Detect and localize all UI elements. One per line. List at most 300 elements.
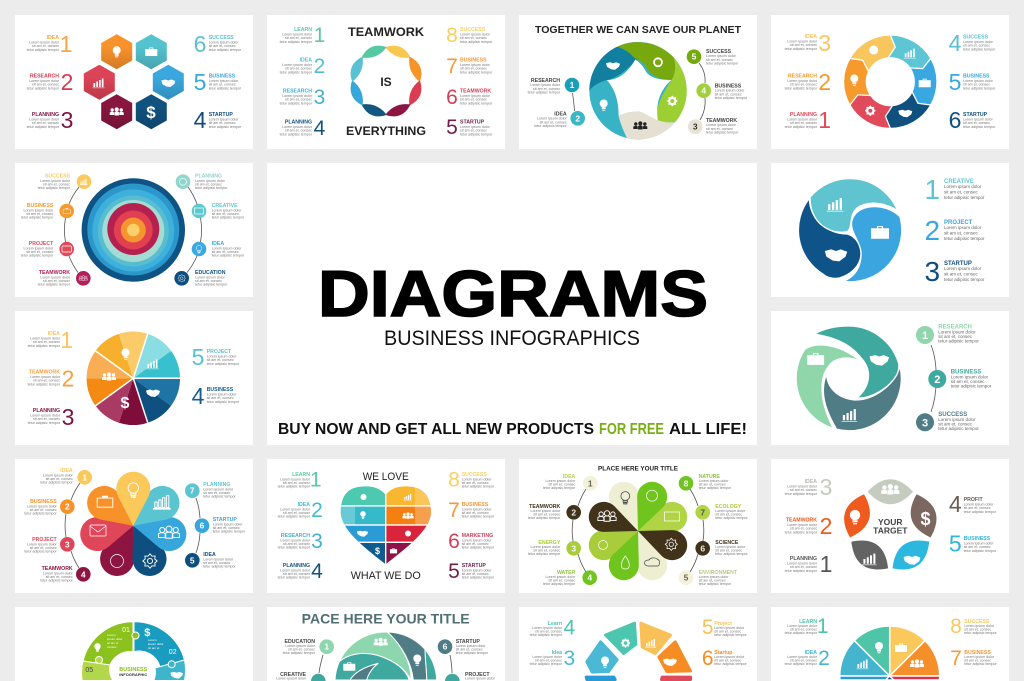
left labels: sit am et, consec <box>790 527 817 531</box>
left labels: sit am et, consec <box>283 542 310 546</box>
right labels: sit am et, consec <box>195 279 222 283</box>
list labels: sit am et, consec <box>944 189 979 194</box>
right labels: Lorem ipsum dolor <box>963 118 994 122</box>
left labels <box>530 616 575 670</box>
numbered circles: 2 <box>571 507 576 517</box>
labels: Lorem ipsum dolor <box>276 677 307 681</box>
list labels: tetur adipisic tempor <box>944 195 985 200</box>
panel: arrow ring <box>771 15 1009 149</box>
labels: sit am et, consec <box>288 648 315 652</box>
left labels: Lorem ipsum dolor <box>787 523 818 527</box>
right labels: 8 <box>950 615 962 638</box>
left labels: 4 <box>314 117 326 140</box>
step labels: Lorem ipsum dolor <box>530 83 561 87</box>
left labels: Lorem ipsum dolor <box>24 208 54 212</box>
swirl circle <box>798 179 902 282</box>
step labels: RESEARCH <box>531 78 560 84</box>
left labels: Lorem ipsum dolor <box>546 479 576 483</box>
numbered circles: 6 <box>700 543 705 553</box>
list labels: 1 <box>925 174 940 205</box>
left labels: PLANNING <box>283 563 310 569</box>
left labels: SUCCESS <box>45 174 71 180</box>
left labels: sit am et, consec <box>26 212 53 216</box>
left labels: Lorem ipsum dolor <box>43 571 73 575</box>
numbered circles: 7 <box>700 507 705 517</box>
labels: Lorem ipsum dolor <box>465 677 496 681</box>
left labels: tetur adipisic tempor <box>785 530 818 534</box>
right labels: 7 <box>446 55 458 78</box>
right labels: Lorem ipsum dolor <box>212 246 242 250</box>
left labels: 1 <box>820 551 832 577</box>
right labels: tetur adipisic tempor <box>207 362 240 366</box>
outline icons <box>90 483 180 568</box>
panel: three part yin yang <box>771 163 1009 297</box>
right labels: BUSINESS <box>460 58 487 64</box>
right labels <box>950 615 997 670</box>
right labels: tetur adipisic tempor <box>699 582 732 586</box>
left labels <box>28 327 74 430</box>
right labels <box>699 474 748 586</box>
right labels: SUCCESS <box>964 619 990 625</box>
left labels: tetur adipisic tempor <box>543 582 576 586</box>
right labels: sit am et, consec <box>207 358 234 362</box>
right labels: tetur adipisic tempor <box>460 70 493 74</box>
right labels: Lorem ipsum dolor <box>714 626 745 630</box>
left labels: 3 <box>818 30 831 56</box>
right labels: Lorem ipsum dolor <box>209 118 239 122</box>
left labels: sit am et, consec <box>548 579 575 583</box>
left labels: Lorem ipsum dolor <box>280 477 311 481</box>
puzzle text and icons: 05 <box>85 667 93 674</box>
step labels: RESEARCH <box>938 324 972 330</box>
numbered circles: 6 <box>443 642 448 652</box>
step labels: tetur adipisic tempor <box>706 130 739 134</box>
left labels: 2 <box>61 69 73 95</box>
left labels: 2 <box>818 647 830 670</box>
left labels: sit am et, consec <box>790 659 817 663</box>
right labels: sit am et, consec <box>212 250 239 254</box>
right labels: SCIENCE <box>715 540 739 546</box>
left labels: LEARN <box>799 619 817 625</box>
star ring <box>589 42 687 139</box>
right labels: Lorem ipsum dolor <box>207 354 237 358</box>
right labels: PROFIT <box>964 497 984 503</box>
right labels <box>194 31 242 133</box>
left labels: IDEA <box>47 35 59 41</box>
right labels: MARKETING <box>462 533 493 539</box>
right labels: Lorem ipsum dolor <box>964 542 994 546</box>
panel: main title <box>267 163 757 445</box>
left labels: TEAMWORK <box>29 370 60 376</box>
step circles <box>916 326 946 431</box>
left labels: tetur adipisic tempor <box>278 514 311 518</box>
right labels: tetur adipisic tempor <box>714 633 747 637</box>
list labels: Lorem ipsum dolor <box>944 184 982 189</box>
left labels: tetur adipisic tempor <box>530 662 563 666</box>
puzzle text and icons: 02 <box>169 649 177 656</box>
left labels: Lorem ipsum dolor <box>282 94 313 98</box>
right labels: tetur adipisic tempor <box>460 132 493 136</box>
left labels: TEAMWORK <box>39 270 70 276</box>
puzzle text and icons: consec <box>107 645 117 649</box>
puzzle centre title: INFOGRAPHIC <box>119 672 147 677</box>
title: diagrams: DIAGRAMS <box>318 257 708 330</box>
call to action: ALL LIFE! <box>669 421 747 438</box>
right labels: 4 <box>192 383 205 409</box>
left labels: sit am et, consec <box>285 36 312 40</box>
left labels: PROJECT <box>29 241 54 247</box>
step icons <box>62 178 204 282</box>
numbered steps: 3 <box>693 122 698 132</box>
right labels: sit am et, consec <box>462 572 489 576</box>
left labels: Lorem ipsum dolor <box>531 509 561 513</box>
concentric circles <box>82 178 185 282</box>
connectors <box>319 655 452 673</box>
left labels: 1 <box>818 107 831 133</box>
step labels: TEAMWORK <box>706 118 737 124</box>
right labels: SUCCESS <box>462 472 487 478</box>
right labels: sit am et, consec <box>714 630 741 634</box>
numbered circles: 1 <box>82 472 87 482</box>
numbered circles: 1 <box>324 642 329 652</box>
left labels: tetur adipisic tempor <box>785 125 818 129</box>
left labels: tetur adipisic tempor <box>785 569 818 573</box>
right labels: tetur adipisic tempor <box>715 516 748 520</box>
panel: pace here your title <box>267 607 505 681</box>
heading: everything: EVERYTHING <box>346 124 426 138</box>
left labels: TEAMWORK <box>42 566 73 572</box>
left labels: Lorem ipsum dolor <box>531 545 561 549</box>
panel: pie chart <box>15 311 253 445</box>
left labels: IDEA <box>300 58 312 64</box>
left labels: sit am et, consec <box>32 83 59 87</box>
right labels: Lorem ipsum dolor <box>460 125 491 129</box>
numbered circles: 7 <box>190 486 195 496</box>
left labels: ENERGY <box>538 540 561 546</box>
right labels <box>702 616 747 670</box>
left labels: IDEA <box>805 479 817 485</box>
right labels: Lorem ipsum dolor <box>964 655 995 659</box>
puzzle text and icons: ipsum dolor <box>107 637 123 641</box>
heading: place here your title: PLACE HERE YOUR TITLE <box>598 466 679 473</box>
right labels: 6 <box>949 107 961 133</box>
right labels: sit am et, consec <box>963 83 990 87</box>
step labels <box>528 49 748 134</box>
panel: swirl with open centre <box>771 311 1009 445</box>
left labels: tetur adipisic tempor <box>24 550 58 554</box>
right labels: 6 <box>446 86 458 109</box>
left labels: sit am et, consec <box>283 572 310 576</box>
right labels: NATURE <box>699 474 720 480</box>
list labels: PROJECT <box>944 220 973 226</box>
right labels: BUSINESS <box>209 74 236 80</box>
numbered circles: 4 <box>587 573 592 583</box>
right labels: Lorem ipsum dolor <box>213 522 243 526</box>
labels: STARTUP <box>456 639 480 645</box>
list labels: tetur adipisic tempor <box>944 277 985 282</box>
right labels: 5 <box>949 69 961 95</box>
list labels: 3 <box>925 256 940 287</box>
right labels: 6 <box>194 31 206 57</box>
left labels: Lorem ipsum dolor <box>280 538 311 542</box>
left labels: Lorem ipsum dolor <box>532 626 563 630</box>
left labels: PLANNING <box>32 112 59 118</box>
numbered circles: 8 <box>684 478 689 488</box>
left labels: IDEA <box>298 502 310 508</box>
right labels: SUCCESS <box>460 27 486 33</box>
left labels: 2 <box>818 69 831 95</box>
left labels: IDEA <box>48 331 60 337</box>
left labels: tetur adipisic tempor <box>21 216 54 220</box>
left labels: Lorem ipsum dolor <box>787 118 818 122</box>
right labels <box>195 174 245 286</box>
left labels: Lorem ipsum dolor <box>280 568 311 572</box>
right labels: sit am et, consec <box>715 513 742 517</box>
left labels: tetur adipisic tempor <box>278 484 311 488</box>
puzzle centre title: BUSINESS <box>119 667 148 673</box>
left labels: Lorem ipsum dolor <box>787 655 818 659</box>
left labels: TEAMWORK <box>786 518 817 524</box>
right labels: sit am et, consec <box>195 182 222 186</box>
numbered circles: 5 <box>684 573 689 583</box>
left labels: tetur adipisic tempor <box>28 421 61 425</box>
step labels: sit am et, consec <box>951 379 985 384</box>
left labels: Lorem ipsum dolor <box>43 473 73 477</box>
right labels: IDEA <box>212 241 224 247</box>
left labels: sit am et, consec <box>285 98 312 102</box>
left labels: tetur adipisic tempor <box>280 40 313 44</box>
left labels: TEAMWORK <box>529 504 561 510</box>
right labels <box>192 344 240 409</box>
right labels: BUSINESS <box>964 650 991 656</box>
left labels: 3 <box>563 647 575 670</box>
heading: what we do: WHAT WE DO <box>351 570 421 582</box>
step labels: Lorem ipsum dolor <box>938 330 976 334</box>
right labels: 6 <box>702 647 714 670</box>
right labels: STARTUP <box>213 517 237 523</box>
left labels: Lorem ipsum dolor <box>29 118 60 122</box>
left labels: Lorem ipsum dolor <box>282 32 313 36</box>
leaf ring <box>838 479 942 578</box>
eco petals <box>584 477 692 585</box>
step labels: tetur adipisic tempor <box>715 96 748 100</box>
right labels: Project <box>714 621 732 627</box>
right labels: ECOLOGY <box>715 504 742 510</box>
right labels: STARTUP <box>462 563 486 569</box>
panel: tile arch <box>519 607 757 681</box>
right labels: sit am et, consec <box>460 36 487 40</box>
left labels: sit am et, consec <box>283 511 310 515</box>
left labels: Learn <box>548 621 562 627</box>
left labels: tetur adipisic tempor <box>40 480 74 484</box>
left labels: Lorem ipsum dolor <box>546 575 576 579</box>
heading: teamwork: TEAMWORK <box>348 25 424 39</box>
step labels: BUSINESS <box>715 84 742 90</box>
left labels: LEARN <box>294 27 312 33</box>
left labels: tetur adipisic tempor <box>28 344 61 348</box>
right labels: STARTUP <box>209 112 233 118</box>
right labels: tetur adipisic tempor <box>964 549 997 553</box>
heading: PACE HERE YOUR TITLE <box>302 610 470 626</box>
step labels: sit am et, consec <box>540 120 567 124</box>
right labels: sit am et, consec <box>209 121 236 125</box>
heading: we love: WE LOVE <box>363 471 409 483</box>
left labels: tetur adipisic tempor <box>528 516 561 520</box>
numbered circles: 6 <box>200 521 205 531</box>
puzzle text and icons: ipsum dolor <box>148 642 164 646</box>
panel: heart <box>267 459 505 593</box>
hexagon ring with icons <box>84 34 184 129</box>
right labels: sit am et, consec <box>462 542 489 546</box>
left labels: Lorem ipsum dolor <box>282 125 313 129</box>
left labels: sit am et, consec <box>283 481 310 485</box>
right labels: IDEA <box>203 552 216 558</box>
left labels: tetur adipisic tempor <box>785 47 818 51</box>
list labels: Lorem ipsum dolor <box>944 225 982 230</box>
left labels: sit am et, consec <box>790 83 817 87</box>
left labels: sit am et, consec <box>790 43 817 47</box>
right labels: sit am et, consec <box>462 481 489 485</box>
right labels: Lorem ipsum dolor <box>203 557 234 561</box>
right labels: tetur adipisic tempor <box>460 40 493 44</box>
left labels: tetur adipisic tempor <box>280 70 313 74</box>
right labels: SUCCESS <box>209 35 234 41</box>
right labels: sit am et, consec <box>213 526 240 530</box>
numbered circles: 5 <box>190 555 195 565</box>
swirl icons <box>343 638 421 671</box>
right labels: STARTUP <box>963 112 988 118</box>
numbered circles: 3 <box>65 539 70 549</box>
right labels: sit am et, consec <box>203 561 230 565</box>
right labels: STARTUP <box>460 120 485 126</box>
right labels: Lorem ipsum dolor <box>460 32 491 36</box>
right labels: PROJECT <box>207 349 232 355</box>
arch tiles <box>586 623 691 680</box>
connector arcs <box>572 489 704 572</box>
left labels: sit am et, consec <box>30 546 57 550</box>
ring icons <box>850 46 931 117</box>
left labels: 2 <box>311 499 323 522</box>
step labels <box>938 324 992 431</box>
puzzle text and icons: Lorem <box>148 638 157 642</box>
labels: tetur adipisic tempor <box>456 651 489 655</box>
left labels: 4 <box>563 616 575 639</box>
left labels: Lorem ipsum dolor <box>30 375 61 379</box>
left labels: Lorem ipsum dolor <box>29 79 60 83</box>
connector arcs <box>64 187 202 272</box>
right labels: Lorem ipsum dolor <box>699 479 729 483</box>
left labels: Lorem ipsum dolor <box>24 246 54 250</box>
right labels: sit am et, consec <box>462 511 489 515</box>
heart icons <box>357 494 414 556</box>
left labels: tetur adipisic tempor <box>785 86 818 90</box>
left labels: Lorem ipsum dolor <box>27 504 57 508</box>
right labels: Lorem ipsum dolor <box>462 568 492 572</box>
panel: concentric target <box>15 163 253 297</box>
right labels: tetur adipisic tempor <box>963 125 996 129</box>
right labels: Lorem ipsum dolor <box>963 79 994 83</box>
left labels: sit am et, consec <box>533 549 560 553</box>
right labels: Lorem ipsum dolor <box>714 655 745 659</box>
right labels: Lorem ipsum dolor <box>462 507 492 511</box>
right labels: EDUCATION <box>195 270 226 276</box>
left labels: Lorem ipsum dolor <box>40 275 71 279</box>
heart grid <box>340 486 432 566</box>
left labels: sit am et, consec <box>32 121 59 125</box>
swirl icons <box>825 198 889 261</box>
left labels: PROJECT <box>32 537 58 543</box>
right labels: Lorem ipsum dolor <box>207 392 237 396</box>
left labels: BUSINESS <box>30 499 57 505</box>
left labels: Lorem ipsum dolor <box>30 414 61 418</box>
left labels: Lorem ipsum dolor <box>30 336 61 340</box>
right labels: 7 <box>448 499 460 522</box>
right labels: BUSINESS <box>207 387 234 393</box>
step circles <box>59 174 206 286</box>
step labels: Lorem ipsum dolor <box>715 89 745 93</box>
right labels: Lorem ipsum dolor <box>462 477 492 481</box>
left labels: tetur adipisic tempor <box>278 575 311 579</box>
right labels: 5 <box>194 69 206 95</box>
step circles: 2 <box>934 374 940 386</box>
left labels <box>21 174 71 286</box>
puzzle text and icons <box>85 627 183 679</box>
right labels: 4 <box>949 30 962 56</box>
right labels: sit am et, consec <box>207 396 234 400</box>
step labels: Lorem ipsum dolor <box>951 374 988 380</box>
right labels: sit am et, consec <box>715 549 742 553</box>
right labels: BUSINESS <box>963 74 990 80</box>
left labels <box>785 30 831 133</box>
right labels: sit am et, consec <box>963 44 990 48</box>
call to action: FOR FREE <box>599 421 664 438</box>
ring icons <box>600 58 678 129</box>
left labels: sit am et, consec <box>533 513 560 517</box>
left labels: tetur adipisic tempor <box>543 486 576 490</box>
left labels: tetur adipisic tempor <box>27 48 60 52</box>
left labels: tetur adipisic tempor <box>278 545 311 549</box>
right labels: 5 <box>949 531 962 557</box>
step labels: Lorem ipsum dolor <box>938 417 976 422</box>
connector <box>931 345 936 412</box>
labels: Lorem ipsum dolor <box>285 644 316 648</box>
left labels: tetur adipisic tempor <box>27 125 60 129</box>
left labels: tetur adipisic tempor <box>280 132 313 136</box>
pie slices <box>840 626 940 680</box>
right labels: sit am et, consec <box>460 67 487 71</box>
labels: tetur adipisic tempor <box>283 651 316 655</box>
left labels: sit am et, consec <box>33 417 60 421</box>
right labels: CREATIVE <box>212 203 238 209</box>
right labels: sit am et, consec <box>964 545 991 549</box>
left labels: tetur adipisic tempor <box>24 512 58 516</box>
left labels: sit am et, consec <box>43 279 70 283</box>
step labels: Lorem ipsum dolor <box>537 117 567 121</box>
left labels: Lorem ipsum dolor <box>280 507 311 511</box>
left labels: tetur adipisic tempor <box>38 186 71 190</box>
left labels: LEARN <box>292 472 310 478</box>
right labels: sit am et, consec <box>964 659 991 663</box>
puzzle text and icons: Lorem <box>107 633 116 637</box>
left labels: 2 <box>62 366 74 392</box>
right labels: sit am et, consec <box>203 491 230 495</box>
right labels: tetur adipisic tempor <box>462 575 495 579</box>
numbered circles <box>566 476 710 585</box>
step labels: SUCCESS <box>938 412 967 418</box>
left labels <box>785 615 830 670</box>
step labels: sit am et, consec <box>533 87 560 91</box>
labels: CREATIVE <box>280 672 307 678</box>
